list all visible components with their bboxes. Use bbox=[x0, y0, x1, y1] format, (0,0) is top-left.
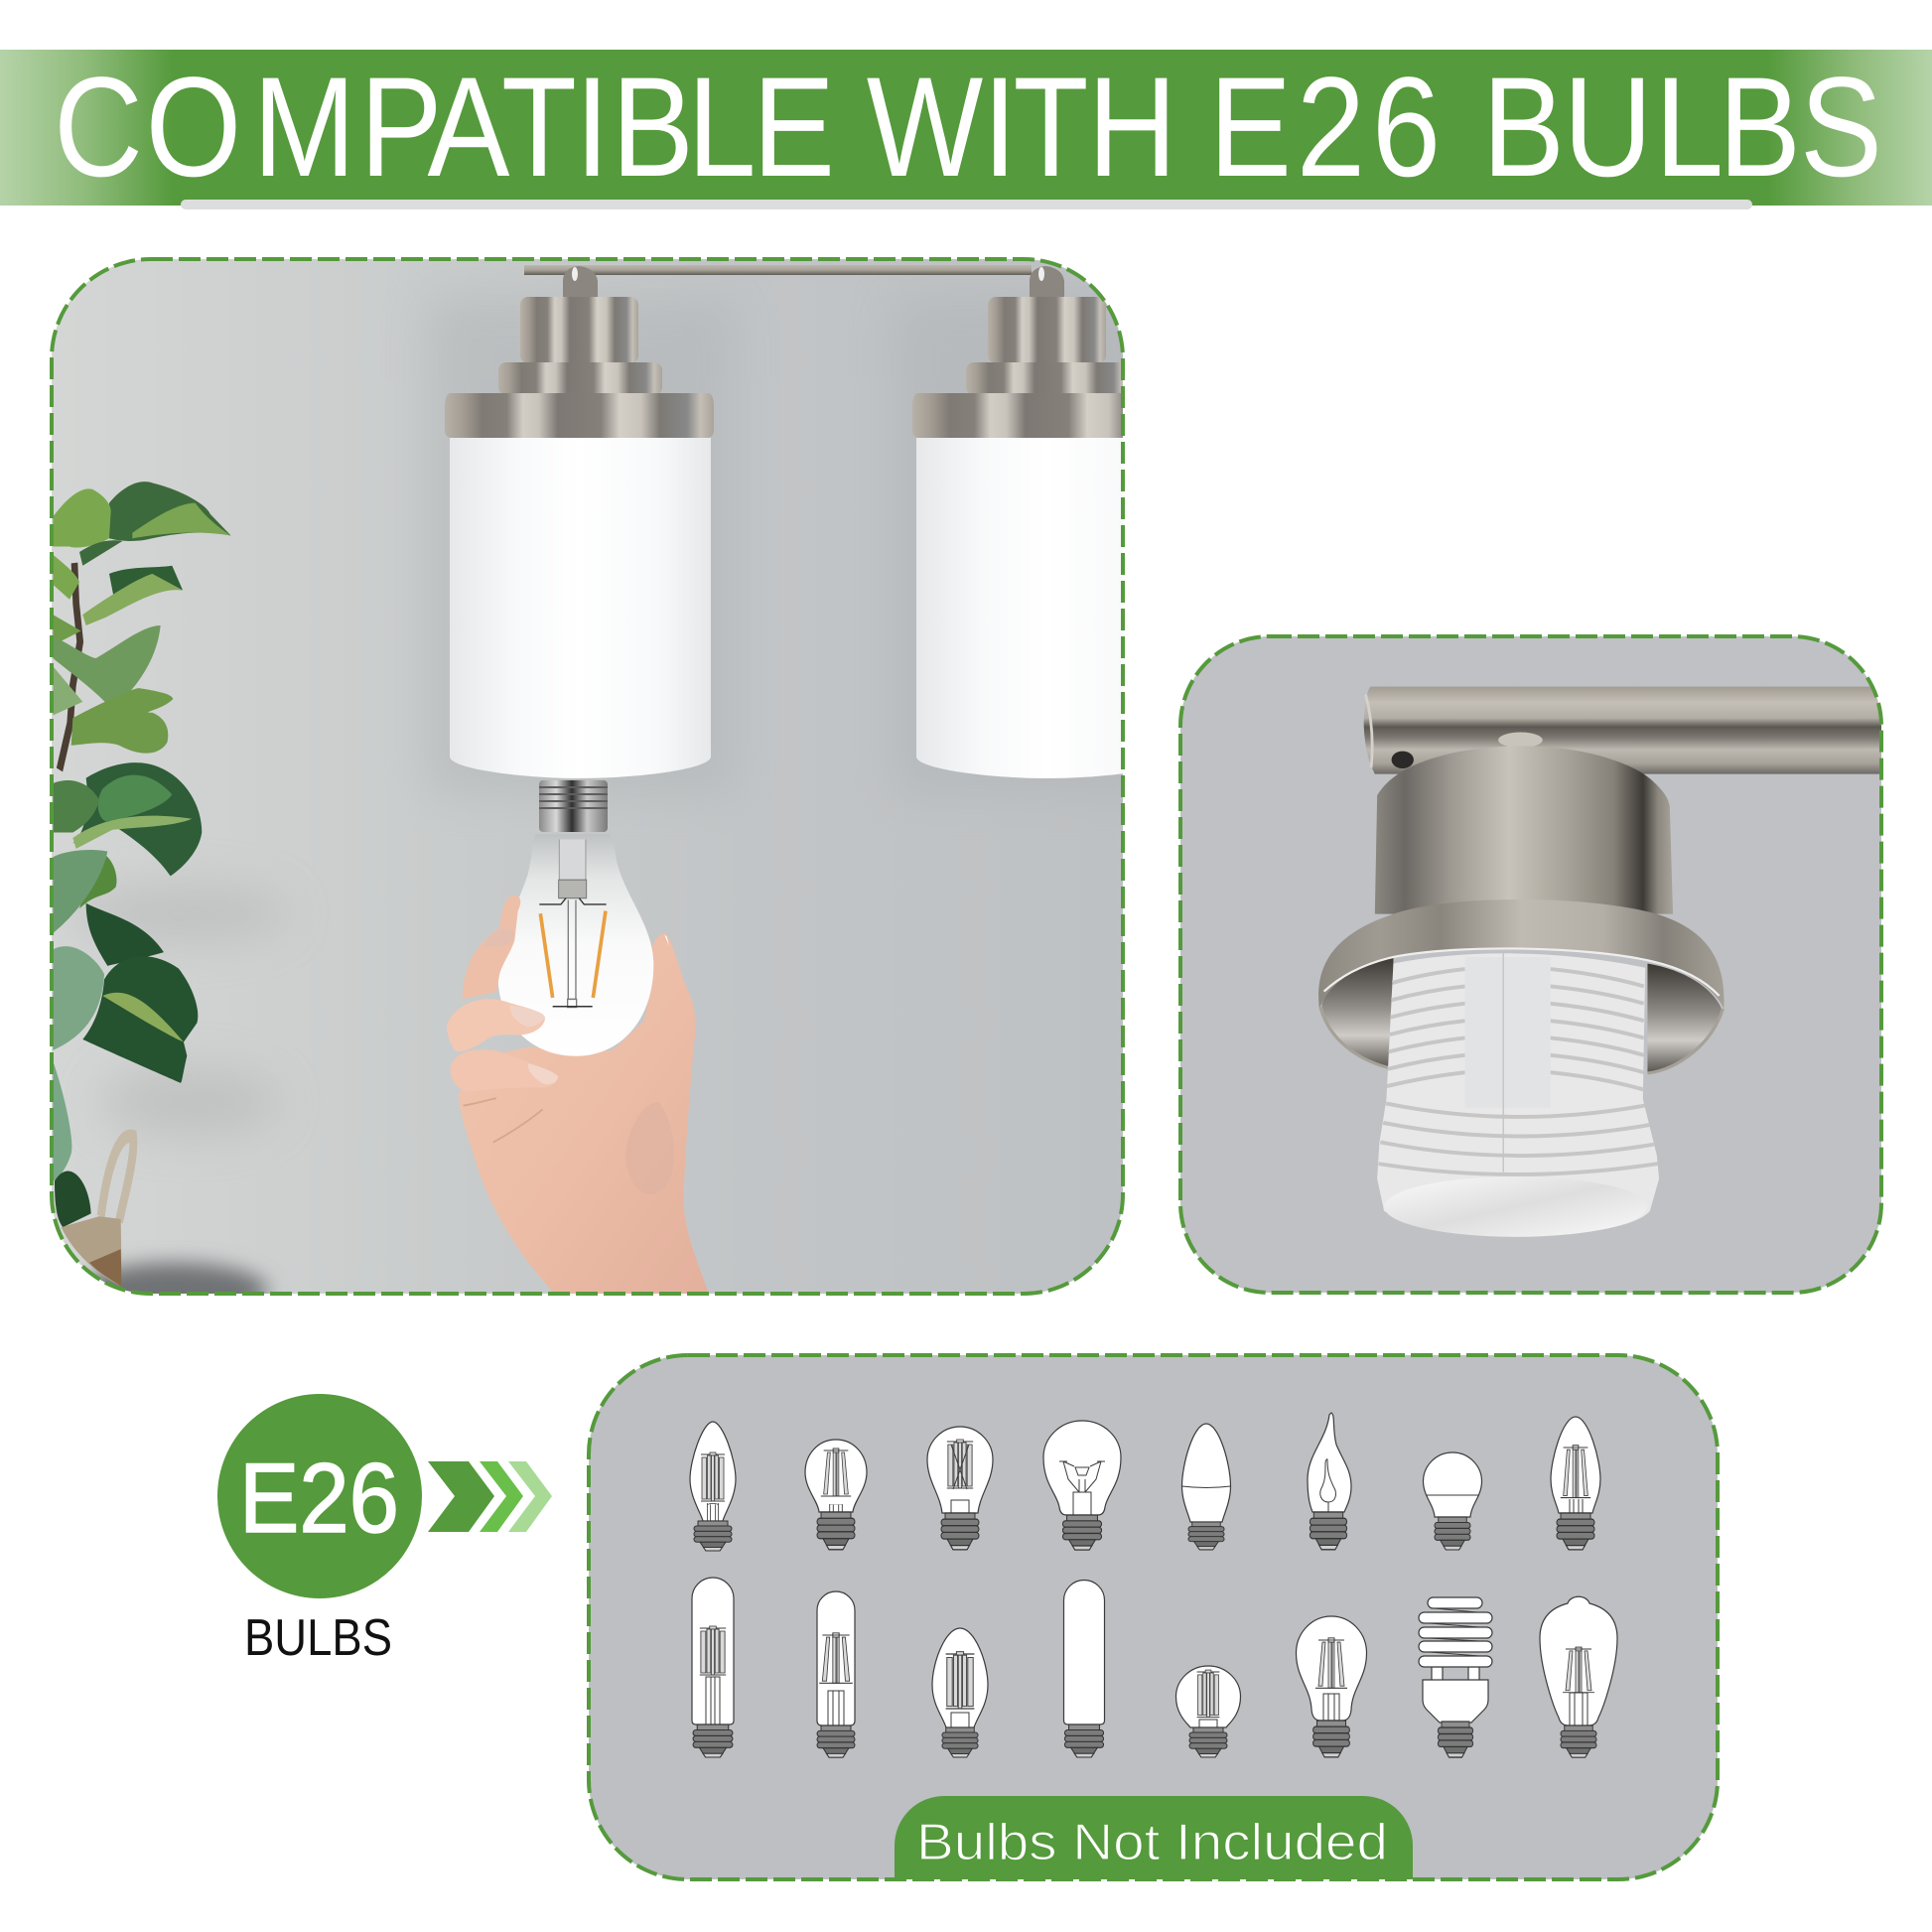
icon: ST edison filament bulb bbox=[1540, 1596, 1617, 1757]
icon: classic incandescent bulb bbox=[1043, 1421, 1121, 1550]
tube screw hole bbox=[1392, 752, 1414, 768]
callout: bulbs not included bbox=[895, 1796, 1413, 1879]
icon: globe filament bulb bbox=[805, 1440, 867, 1550]
horizontal metal tube bbox=[1364, 687, 1892, 774]
wall background bbox=[52, 259, 1123, 1294]
flange ring band bbox=[1318, 899, 1725, 1009]
banner bbox=[0, 49, 1932, 209]
hand fingers bbox=[447, 895, 558, 1092]
socket opening bbox=[1384, 1176, 1647, 1237]
banner underline bbox=[181, 200, 1752, 209]
arrows bbox=[428, 1461, 552, 1532]
flange ring interior bbox=[1321, 957, 1393, 1069]
icon: A filament bulb bbox=[927, 1427, 993, 1550]
lamp fixture right bbox=[912, 266, 1123, 778]
vanity bar bbox=[524, 265, 1032, 275]
panel: socket close-up bbox=[1180, 636, 1892, 1293]
icon: candle filament bulb bbox=[690, 1422, 736, 1551]
dashed border bbox=[1180, 636, 1881, 1293]
icon: small globe bulb bbox=[1175, 1666, 1241, 1757]
light bulb screw base bbox=[539, 780, 608, 832]
plant bbox=[53, 482, 231, 1287]
label: bulbs: BULBS bbox=[244, 1609, 392, 1667]
icon: flame tip bulb bbox=[1308, 1413, 1351, 1550]
icon: CFL spiral bulb bbox=[1419, 1597, 1492, 1757]
dashed border bbox=[52, 259, 1123, 1294]
icon: plain tube bulb bbox=[1064, 1580, 1104, 1757]
icon: wide candle filament bulb bbox=[932, 1628, 988, 1757]
icon: LED candle bulb bbox=[1181, 1424, 1231, 1550]
lamp fixture left bbox=[445, 266, 714, 778]
metal cup bbox=[1375, 746, 1673, 914]
white threaded socket bbox=[1377, 953, 1659, 1235]
E26 badge: E26 bbox=[239, 1443, 399, 1553]
hand palm and thumb bbox=[459, 933, 710, 1297]
icon: LED globe bulb bbox=[1424, 1452, 1481, 1550]
icon: tube filament bulb bbox=[692, 1578, 734, 1757]
panel: lamp with bulb in hand bbox=[52, 259, 1181, 1318]
callout: bulbs not included: Bulbs Not Included bbox=[916, 1814, 1388, 1871]
icon: short tube filament bulb bbox=[817, 1591, 855, 1757]
icon: A filament bulb 2 bbox=[1297, 1616, 1366, 1757]
icon: candle filament bulb 2 bbox=[1551, 1417, 1600, 1550]
E26 badge bbox=[217, 1394, 422, 1598]
light bulb glass with filament bbox=[498, 834, 653, 1056]
title: COMPATIBLE WITH E26 BULBS bbox=[54, 49, 1882, 207]
panel: bulb types bbox=[589, 1355, 1718, 1879]
